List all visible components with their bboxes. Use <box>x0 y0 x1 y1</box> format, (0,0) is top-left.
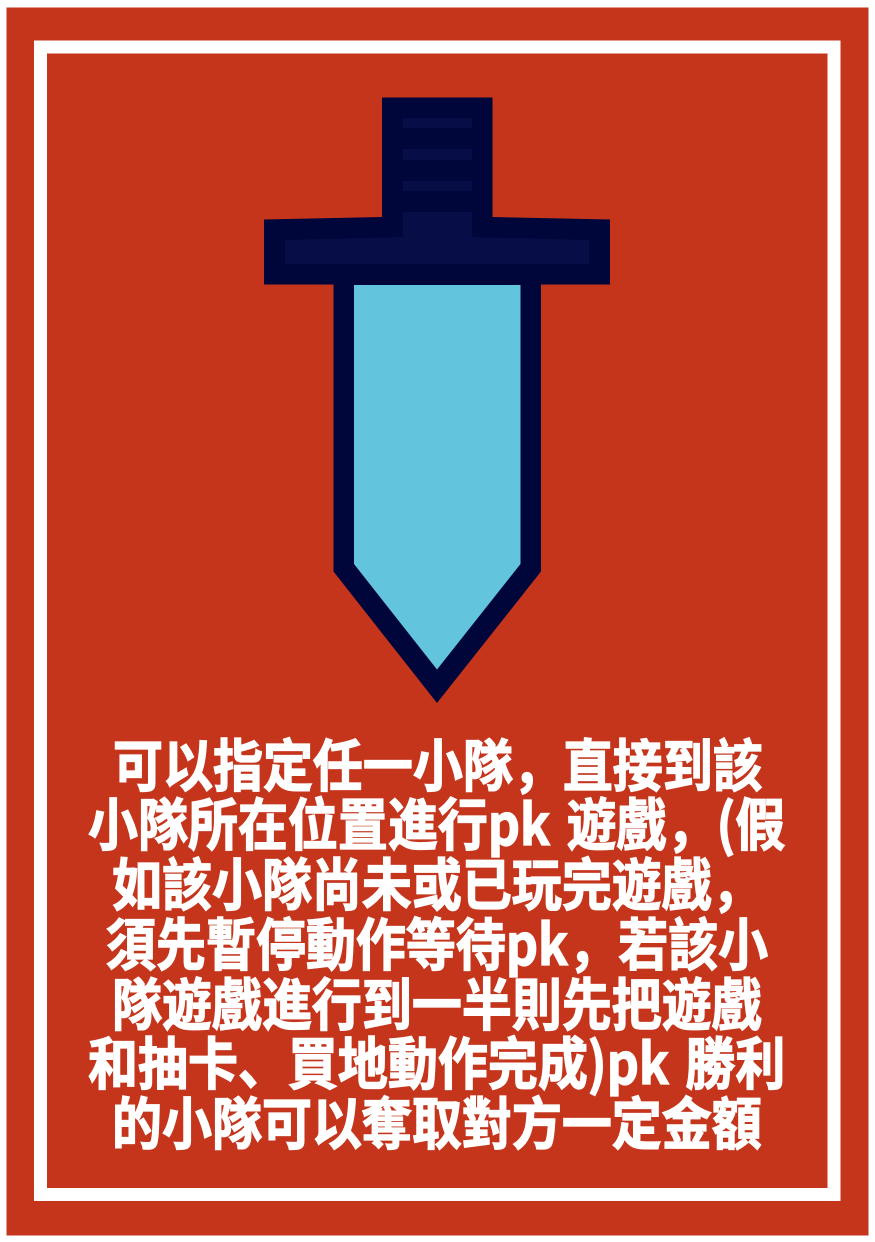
text block: description: 小隊所在位置進行pk 遊戲，(假 <box>88 780 785 862</box>
icon: sword <box>264 98 610 703</box>
text block: description: 須先暫停動作等待pk，若該小 <box>106 900 768 982</box>
text block: description: 如該小隊尚未或已玩完遊戲， <box>112 840 762 922</box>
text block: description <box>88 721 785 1161</box>
sword hilt <box>264 98 610 284</box>
text block: description: 隊遊戲進行到一半則先把遊戲 <box>112 960 762 1042</box>
text block: description: 可以指定任一小隊，直接到該 <box>113 721 763 803</box>
text block: description: 和抽卡、買地動作完成)pk 勝利 <box>88 1019 785 1101</box>
sword blade <box>334 284 541 703</box>
text block: description: 的小隊可以奪取對方一定金額 <box>112 1079 762 1161</box>
